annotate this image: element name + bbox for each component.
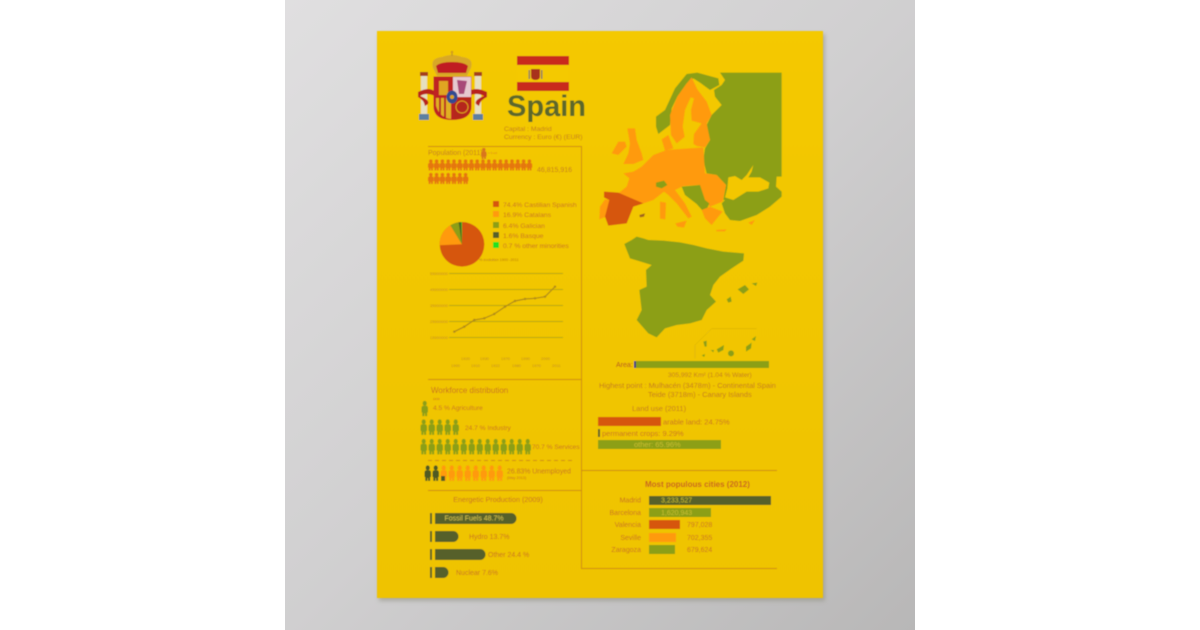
- chart title: % evolution 1900 -2011: [479, 258, 519, 262]
- land use labels: other: 65.96%: [634, 440, 681, 449]
- y axis labels: 15000000: [430, 335, 449, 340]
- Greece and Italian islands: [660, 202, 755, 231]
- x axis labels: 1980: [512, 363, 522, 368]
- Portugal: [599, 199, 609, 219]
- line chart: population evolution: [430, 258, 563, 368]
- x axis labels: 2000: [541, 356, 551, 361]
- y axis labels: [430, 271, 449, 340]
- energy labels: Fossil Fuels 48.7%: [444, 516, 504, 522]
- capital and currency text: Capital : Madrid: [504, 126, 552, 133]
- y axis labels: 35000000: [430, 303, 449, 308]
- x axis labels: 1990: [521, 356, 531, 361]
- Norway: [656, 73, 719, 134]
- population number: 46,815,916: [537, 167, 572, 174]
- city names: Madrid: [620, 498, 641, 504]
- Russia, Turkey and neighbours: [703, 73, 782, 221]
- Spain highlighted: [604, 192, 643, 226]
- cities heading: Most populous cities (2012): [645, 480, 750, 489]
- people scale icon: [481, 148, 497, 159]
- land use bars: [598, 417, 661, 426]
- Balkans: [682, 185, 709, 213]
- area label: Area:: [616, 362, 633, 369]
- icon: flag of Spain: [517, 56, 569, 91]
- x axis labels: 1920: [461, 356, 471, 361]
- workforce labels: [433, 405, 580, 476]
- capital and currency text: [504, 126, 583, 141]
- y axis labels: 55000000: [430, 271, 449, 276]
- chart grid: [449, 274, 563, 338]
- legend: languages: 74.4% Castilian Spanish: [503, 202, 577, 209]
- city names: Valencia: [615, 522, 641, 529]
- energy labels: Hydro 13.7%: [469, 534, 509, 541]
- x axis labels: 1970: [532, 363, 542, 368]
- x axis labels: 1930: [480, 356, 490, 361]
- mainland: [624, 237, 744, 337]
- legend: languages: 16.9% Catalans: [503, 212, 552, 219]
- land use labels: permanent crops: 9.29%: [602, 429, 684, 438]
- panel: land use: [598, 404, 730, 449]
- x axis labels: 1910: [471, 363, 481, 368]
- Sweden and Finland: [670, 77, 712, 147]
- energy heading: Energetic Production (2009): [453, 495, 543, 504]
- city names: Zaragoza: [611, 547, 641, 554]
- city values: 679,624: [687, 547, 712, 554]
- map: Europe: [599, 73, 782, 231]
- panel: workforce distribution: 2009: [433, 397, 440, 401]
- x axis labels: [451, 356, 561, 368]
- Denmark: [662, 135, 673, 151]
- legend: languages: 0.7 % other minorities: [503, 243, 569, 250]
- agriculture pictogram: [422, 401, 428, 416]
- city values: 3,233,527: [661, 498, 692, 504]
- energy bars: [435, 513, 516, 578]
- panel frame lines: [428, 146, 777, 568]
- panel: most populous cities: [609, 480, 771, 554]
- land use labels: [602, 418, 730, 449]
- workforce labels: 24.7 % Industry: [465, 425, 512, 432]
- city values: 797,028: [687, 522, 712, 529]
- people scale icon: = 5 mil: [488, 151, 497, 155]
- population heading: Population (2011): [428, 150, 483, 157]
- city values: [661, 498, 712, 554]
- land use labels: arable land: 24.75%: [663, 418, 730, 426]
- Britain: [623, 128, 643, 164]
- panel: workforce distribution: (May 2013): [507, 476, 527, 480]
- y axis labels: 45000000: [430, 287, 449, 292]
- workforce labels: 70.7 % Services: [532, 444, 580, 451]
- highest point text: Highest point : Mulhacén (3478m) - Continental Spain: [599, 381, 776, 390]
- workforce heading: Workforce distribution: [431, 386, 508, 395]
- panel: population: [428, 148, 572, 184]
- city values: 1,620,943: [661, 510, 692, 517]
- unemployed pictogram: [424, 465, 503, 481]
- legend: languages: 1.6% Basque: [503, 233, 544, 240]
- city bars: [649, 496, 771, 505]
- city names: [609, 498, 641, 554]
- energy labels: Nuclear 7.6%: [456, 570, 498, 577]
- Black Sea: [725, 165, 769, 200]
- Ireland: [612, 142, 627, 155]
- panel: energetic production: [430, 495, 543, 578]
- Gulf of Bothnia and Baltic Sea: [683, 97, 702, 145]
- panel: workforce distribution: [420, 386, 580, 481]
- energy ticks: [430, 513, 432, 578]
- energy labels: [444, 516, 529, 577]
- continental EU: [618, 147, 726, 218]
- x axis labels: 1900: [451, 363, 461, 368]
- x axis labels: 1970: [501, 356, 511, 361]
- Balearic islands: [727, 283, 757, 303]
- y axis labels: 25000000: [430, 319, 449, 324]
- map: Spain: [624, 237, 757, 358]
- industry pictogram: [420, 419, 459, 435]
- workforce labels: 26.83% Unemployed: [507, 468, 571, 476]
- gray wall background: [285, 0, 915, 630]
- Canary islands inset: [695, 329, 757, 358]
- legend: languages: 6.4% Galician: [503, 223, 545, 230]
- Balearic islands: [639, 213, 645, 217]
- Switzerland: [656, 181, 667, 188]
- area bar: [616, 361, 769, 369]
- highest point text: [599, 381, 776, 399]
- capital and currency text: Currency : Euro (€) (EUR): [504, 134, 583, 141]
- population pictogram: [428, 159, 532, 184]
- area value: 305,992 Km² (1.04 % Water): [668, 372, 752, 379]
- legend: languages: [493, 201, 577, 250]
- icon: coat of arms: [418, 51, 487, 120]
- highest point text: Teide (3718m) - Canary Islands: [648, 390, 752, 399]
- x axis labels: 1922: [491, 363, 501, 368]
- energy labels: Other 24.4 %: [488, 552, 529, 559]
- services pictogram: [420, 439, 531, 454]
- city names: Barcelona: [609, 510, 641, 517]
- pie chart: languages: [440, 222, 484, 267]
- title: Spain: [507, 90, 586, 123]
- poster: [377, 31, 823, 598]
- city values: 702,355: [687, 535, 712, 542]
- population line: [453, 286, 556, 333]
- land use heading: Land use (2011): [632, 404, 687, 413]
- workforce labels: 4.5 % Agriculture: [433, 405, 483, 412]
- x axis labels: 2011: [552, 363, 561, 368]
- city names: Seville: [620, 535, 641, 542]
